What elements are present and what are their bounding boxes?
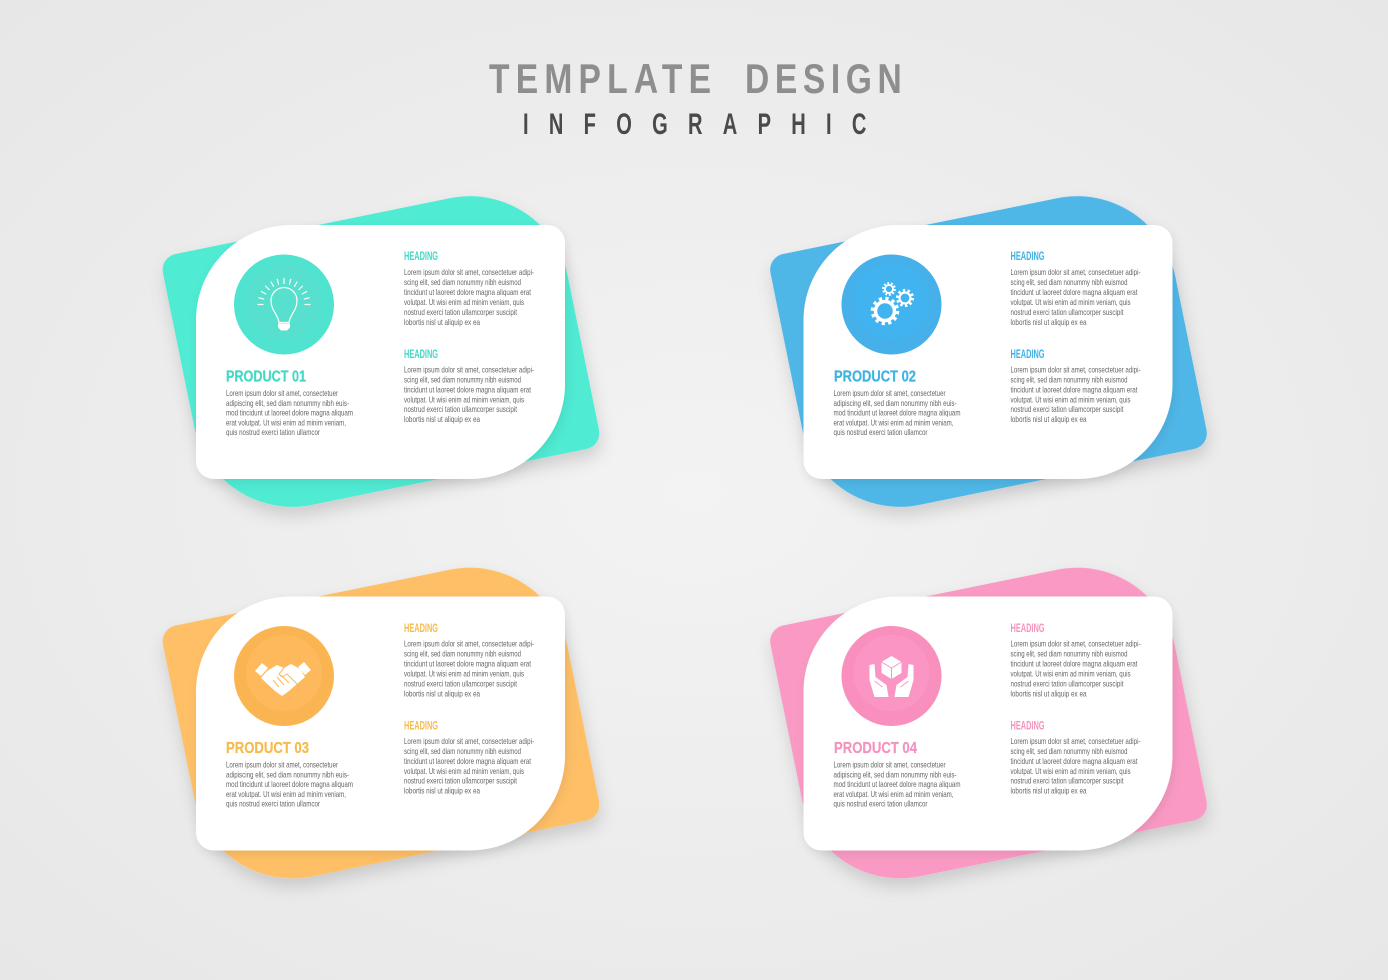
text block 2: lobortis nisl ut aliquip ex ea bbox=[1010, 414, 1087, 424]
text block 2 bbox=[1010, 364, 1141, 424]
white card bbox=[804, 225, 1172, 479]
icon: hands holding box badge bbox=[842, 626, 942, 726]
text block 1: lobortis nisl ut aliquip ex ea bbox=[404, 688, 480, 698]
text block 2: nostrud exerci tation ullamcorper suscipit bbox=[404, 776, 517, 786]
text block 2 bbox=[404, 736, 534, 796]
heading 2: HEADING bbox=[1010, 349, 1045, 361]
product description: mod tincidunt ut laoreet dolore magna aliquam bbox=[834, 779, 961, 789]
text block 1: tincidunt ut laoreet dolore magna aliquam erat bbox=[1010, 287, 1138, 297]
product title: PRODUCT 02 bbox=[834, 368, 916, 386]
text block 1 bbox=[404, 638, 534, 698]
text block 2: volutpat. Ut wisi enim ad minim veniam, quis bbox=[1010, 766, 1130, 776]
text block 2: tincidunt ut laoreet dolore magna aliquam erat bbox=[1010, 384, 1138, 394]
white card bbox=[196, 225, 565, 479]
text block 1: volutpat. Ut wisi enim ad minim veniam, quis bbox=[404, 297, 524, 307]
text block 1: Lorem ipsum dolor sit amet, consectetuer adipi- bbox=[1010, 638, 1141, 648]
text block 2: volutpat. Ut wisi enim ad minim veniam, quis bbox=[1010, 394, 1130, 404]
text block 1: scing elit, sed diam nonummy nibh euismod bbox=[1010, 277, 1128, 287]
text block 2: volutpat. Ut wisi enim ad minim veniam, quis bbox=[404, 766, 524, 776]
text block 1: Lorem ipsum dolor sit amet, consectetuer adipi- bbox=[404, 267, 534, 277]
text block 2: Lorem ipsum dolor sit amet, consectetuer adipi- bbox=[1010, 736, 1141, 746]
panel: product 04 bbox=[767, 550, 1210, 896]
title word: design: DESIGN bbox=[745, 57, 902, 103]
product description: erat volutpat. Ut wisi enim ad minim veniam, bbox=[226, 789, 346, 799]
product description: erat volutpat. Ut wisi enim ad minim veniam, bbox=[226, 418, 346, 428]
text block 2 bbox=[404, 364, 534, 424]
text block 1: tincidunt ut laoreet dolore magna aliquam erat bbox=[404, 287, 531, 297]
text block 2: scing elit, sed diam nonummy nibh euismod bbox=[404, 746, 521, 756]
product description: Lorem ipsum dolor sit amet, consectetuer bbox=[226, 760, 338, 770]
product title: PRODUCT 01 bbox=[226, 368, 306, 386]
orange backing shape bbox=[160, 550, 602, 896]
title word: template: TEMPLATE bbox=[489, 57, 711, 103]
teal backing shape bbox=[160, 178, 602, 525]
text block 2: lobortis nisl ut aliquip ex ea bbox=[404, 414, 480, 424]
white card bbox=[804, 596, 1172, 850]
heading 2: HEADING bbox=[404, 349, 438, 361]
text block 1: scing elit, sed diam nonummy nibh euismod bbox=[1010, 648, 1128, 658]
heading 1: HEADING bbox=[404, 623, 438, 635]
text block 1: Lorem ipsum dolor sit amet, consectetuer adipi- bbox=[404, 638, 534, 648]
icon: light bulb badge bbox=[234, 254, 334, 354]
product description: quis nostrud exerci tation ullamcor bbox=[834, 798, 928, 808]
title bbox=[489, 57, 902, 141]
text block 2: volutpat. Ut wisi enim ad minim veniam, quis bbox=[404, 394, 524, 404]
product title: PRODUCT 03 bbox=[226, 740, 309, 757]
text block 2: lobortis nisl ut aliquip ex ea bbox=[404, 786, 480, 796]
text block 2: scing elit, sed diam nonummy nibh euismod bbox=[404, 374, 521, 384]
product description: mod tincidunt ut laoreet dolore magna aliquam bbox=[226, 779, 353, 789]
text block 2: tincidunt ut laoreet dolore magna aliquam erat bbox=[404, 384, 531, 394]
heading 2: HEADING bbox=[404, 720, 438, 732]
product description bbox=[834, 388, 961, 437]
text block 1: Lorem ipsum dolor sit amet, consectetuer adipi- bbox=[1010, 267, 1141, 277]
text block 1: nostrud exerci tation ullamcorper suscipit bbox=[1010, 307, 1124, 317]
text block 2: Lorem ipsum dolor sit amet, consectetuer adipi- bbox=[404, 736, 534, 746]
text block 1: nostrud exerci tation ullamcorper suscipit bbox=[404, 307, 517, 317]
text block 1: lobortis nisl ut aliquip ex ea bbox=[404, 317, 480, 327]
product description: Lorem ipsum dolor sit amet, consectetuer bbox=[226, 388, 338, 398]
blue backing shape bbox=[767, 178, 1210, 525]
panel: product 02 bbox=[767, 178, 1210, 525]
text block 2: lobortis nisl ut aliquip ex ea bbox=[1010, 786, 1087, 796]
text block 1: volutpat. Ut wisi enim ad minim veniam, quis bbox=[404, 668, 524, 678]
text block 2: tincidunt ut laoreet dolore magna aliquam erat bbox=[1010, 756, 1138, 766]
product description: erat volutpat. Ut wisi enim ad minim veniam, bbox=[834, 789, 954, 799]
panel: product 03 bbox=[160, 550, 602, 896]
text block 2: scing elit, sed diam nonummy nibh euismod bbox=[1010, 374, 1128, 384]
heading 2: HEADING bbox=[1010, 720, 1045, 732]
text block 2 bbox=[1010, 736, 1141, 796]
text block 2: tincidunt ut laoreet dolore magna aliquam erat bbox=[404, 756, 531, 766]
text block 2: nostrud exerci tation ullamcorper suscipit bbox=[1010, 776, 1124, 786]
panel: product 01 bbox=[160, 178, 602, 525]
product description: quis nostrud exerci tation ullamcor bbox=[834, 427, 928, 437]
text block 1: scing elit, sed diam nonummy nibh euismod bbox=[404, 277, 521, 287]
product description: quis nostrud exerci tation ullamcor bbox=[226, 798, 320, 808]
product description: quis nostrud exerci tation ullamcor bbox=[226, 427, 320, 437]
text block 1: lobortis nisl ut aliquip ex ea bbox=[1010, 317, 1087, 327]
product title: PRODUCT 04 bbox=[834, 740, 917, 757]
text block 2: Lorem ipsum dolor sit amet, consectetuer adipi- bbox=[1010, 364, 1141, 374]
product description: adipiscing elit, sed diam nonummy nibh euis- bbox=[226, 770, 349, 780]
text block 1 bbox=[1010, 638, 1141, 698]
text block 1: scing elit, sed diam nonummy nibh euismod bbox=[404, 648, 521, 658]
text block 2: nostrud exerci tation ullamcorper suscipit bbox=[404, 404, 517, 414]
pink backing shape bbox=[767, 550, 1210, 896]
product description: Lorem ipsum dolor sit amet, consectetuer bbox=[834, 760, 946, 770]
text block 1: nostrud exerci tation ullamcorper suscipit bbox=[1010, 678, 1124, 688]
product description: Lorem ipsum dolor sit amet, consectetuer bbox=[834, 388, 946, 398]
heading 1: HEADING bbox=[1010, 251, 1045, 263]
product description bbox=[834, 760, 961, 808]
product description: adipiscing elit, sed diam nonummy nibh euis- bbox=[834, 770, 957, 780]
text block 2: nostrud exerci tation ullamcorper suscipit bbox=[1010, 404, 1124, 414]
text block 1: volutpat. Ut wisi enim ad minim veniam, quis bbox=[1010, 668, 1130, 678]
text block 1 bbox=[404, 267, 534, 327]
text block 1: tincidunt ut laoreet dolore magna aliquam erat bbox=[404, 658, 531, 668]
text block 1: tincidunt ut laoreet dolore magna aliquam erat bbox=[1010, 658, 1138, 668]
icon: gears badge bbox=[842, 254, 942, 354]
product description: adipiscing elit, sed diam nonummy nibh euis- bbox=[226, 398, 349, 408]
text block 1: volutpat. Ut wisi enim ad minim veniam, quis bbox=[1010, 297, 1130, 307]
product description: mod tincidunt ut laoreet dolore magna aliquam bbox=[834, 408, 961, 418]
white card bbox=[196, 596, 565, 850]
text block 1: lobortis nisl ut aliquip ex ea bbox=[1010, 688, 1087, 698]
text block 2: scing elit, sed diam nonummy nibh euismod bbox=[1010, 746, 1128, 756]
heading 1: HEADING bbox=[1010, 623, 1045, 635]
product description bbox=[226, 760, 353, 808]
product description: mod tincidunt ut laoreet dolore magna aliquam bbox=[226, 408, 353, 418]
heading 1: HEADING bbox=[404, 251, 438, 263]
product description bbox=[226, 388, 353, 437]
text block 1 bbox=[1010, 267, 1141, 327]
text block 1: nostrud exerci tation ullamcorper suscipit bbox=[404, 678, 517, 688]
product description: erat volutpat. Ut wisi enim ad minim veniam, bbox=[834, 418, 954, 428]
text block 2: Lorem ipsum dolor sit amet, consectetuer adipi- bbox=[404, 364, 534, 374]
subtitle: infographic: INFOGRAPHIC bbox=[523, 108, 866, 141]
product description: adipiscing elit, sed diam nonummy nibh euis- bbox=[834, 398, 957, 408]
icon: handshake badge bbox=[234, 626, 334, 726]
